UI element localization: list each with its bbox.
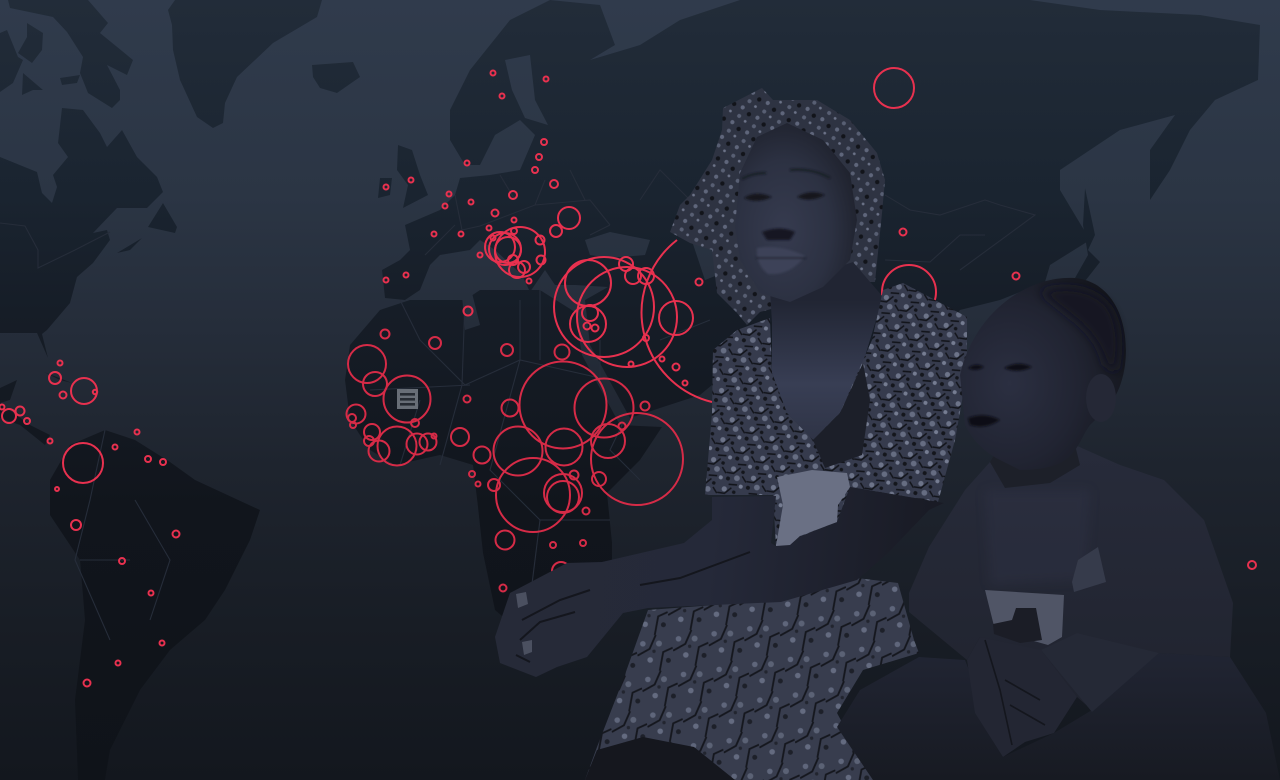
land: Newfoundland and Nova Scotia xyxy=(117,203,177,253)
country borders xyxy=(0,170,1035,640)
woman neckline print xyxy=(813,363,870,468)
land: Mexico and Central America xyxy=(0,372,72,445)
woman arm xyxy=(495,487,944,677)
icon: document xyxy=(397,389,418,409)
circles: Europe xyxy=(384,70,580,316)
circles: Asia and Pacific xyxy=(874,68,1256,569)
woman skirt hem xyxy=(585,737,735,780)
boy collar xyxy=(990,445,1080,488)
woman hands creases xyxy=(516,552,750,662)
facial features xyxy=(742,170,830,274)
circles: Americas xyxy=(0,360,180,686)
woman face xyxy=(735,123,857,302)
boy cuff xyxy=(1041,633,1159,712)
boy shirt print xyxy=(985,547,1106,645)
woman skirt xyxy=(585,578,919,780)
land: Africa xyxy=(345,290,662,640)
inland seas xyxy=(462,55,730,330)
woman bow xyxy=(776,470,850,546)
photo: woman xyxy=(495,88,967,780)
boy finger creases xyxy=(985,640,1045,745)
woman neck and chest xyxy=(770,262,883,440)
boy hair xyxy=(1040,288,1119,372)
land: South America xyxy=(50,430,260,780)
woman headscarf xyxy=(670,88,885,325)
circles: Africa xyxy=(346,330,683,592)
boy hands xyxy=(967,637,1077,757)
land: British Isles xyxy=(378,145,428,208)
boy head xyxy=(960,278,1126,470)
boy ear xyxy=(1086,374,1116,422)
land: North America xyxy=(0,108,163,358)
woman fingernails xyxy=(516,592,532,655)
photo: boy xyxy=(837,278,1280,780)
roof print xyxy=(1072,547,1106,592)
land: Greenland xyxy=(168,0,322,128)
boy legs xyxy=(837,653,1280,780)
boy sweater chest shading xyxy=(985,490,1090,585)
boy sweater xyxy=(909,445,1233,710)
land: Iceland xyxy=(312,62,360,93)
woman dress bodice xyxy=(705,283,967,546)
land: Arctic islands xyxy=(0,0,133,108)
data circles xyxy=(0,68,1256,686)
boy features xyxy=(968,364,1032,427)
land: Eurasia xyxy=(382,0,1260,418)
land: Japan and Sakhalin xyxy=(1075,188,1100,285)
circles: Middle East xyxy=(554,240,712,402)
truck xyxy=(993,608,1042,643)
